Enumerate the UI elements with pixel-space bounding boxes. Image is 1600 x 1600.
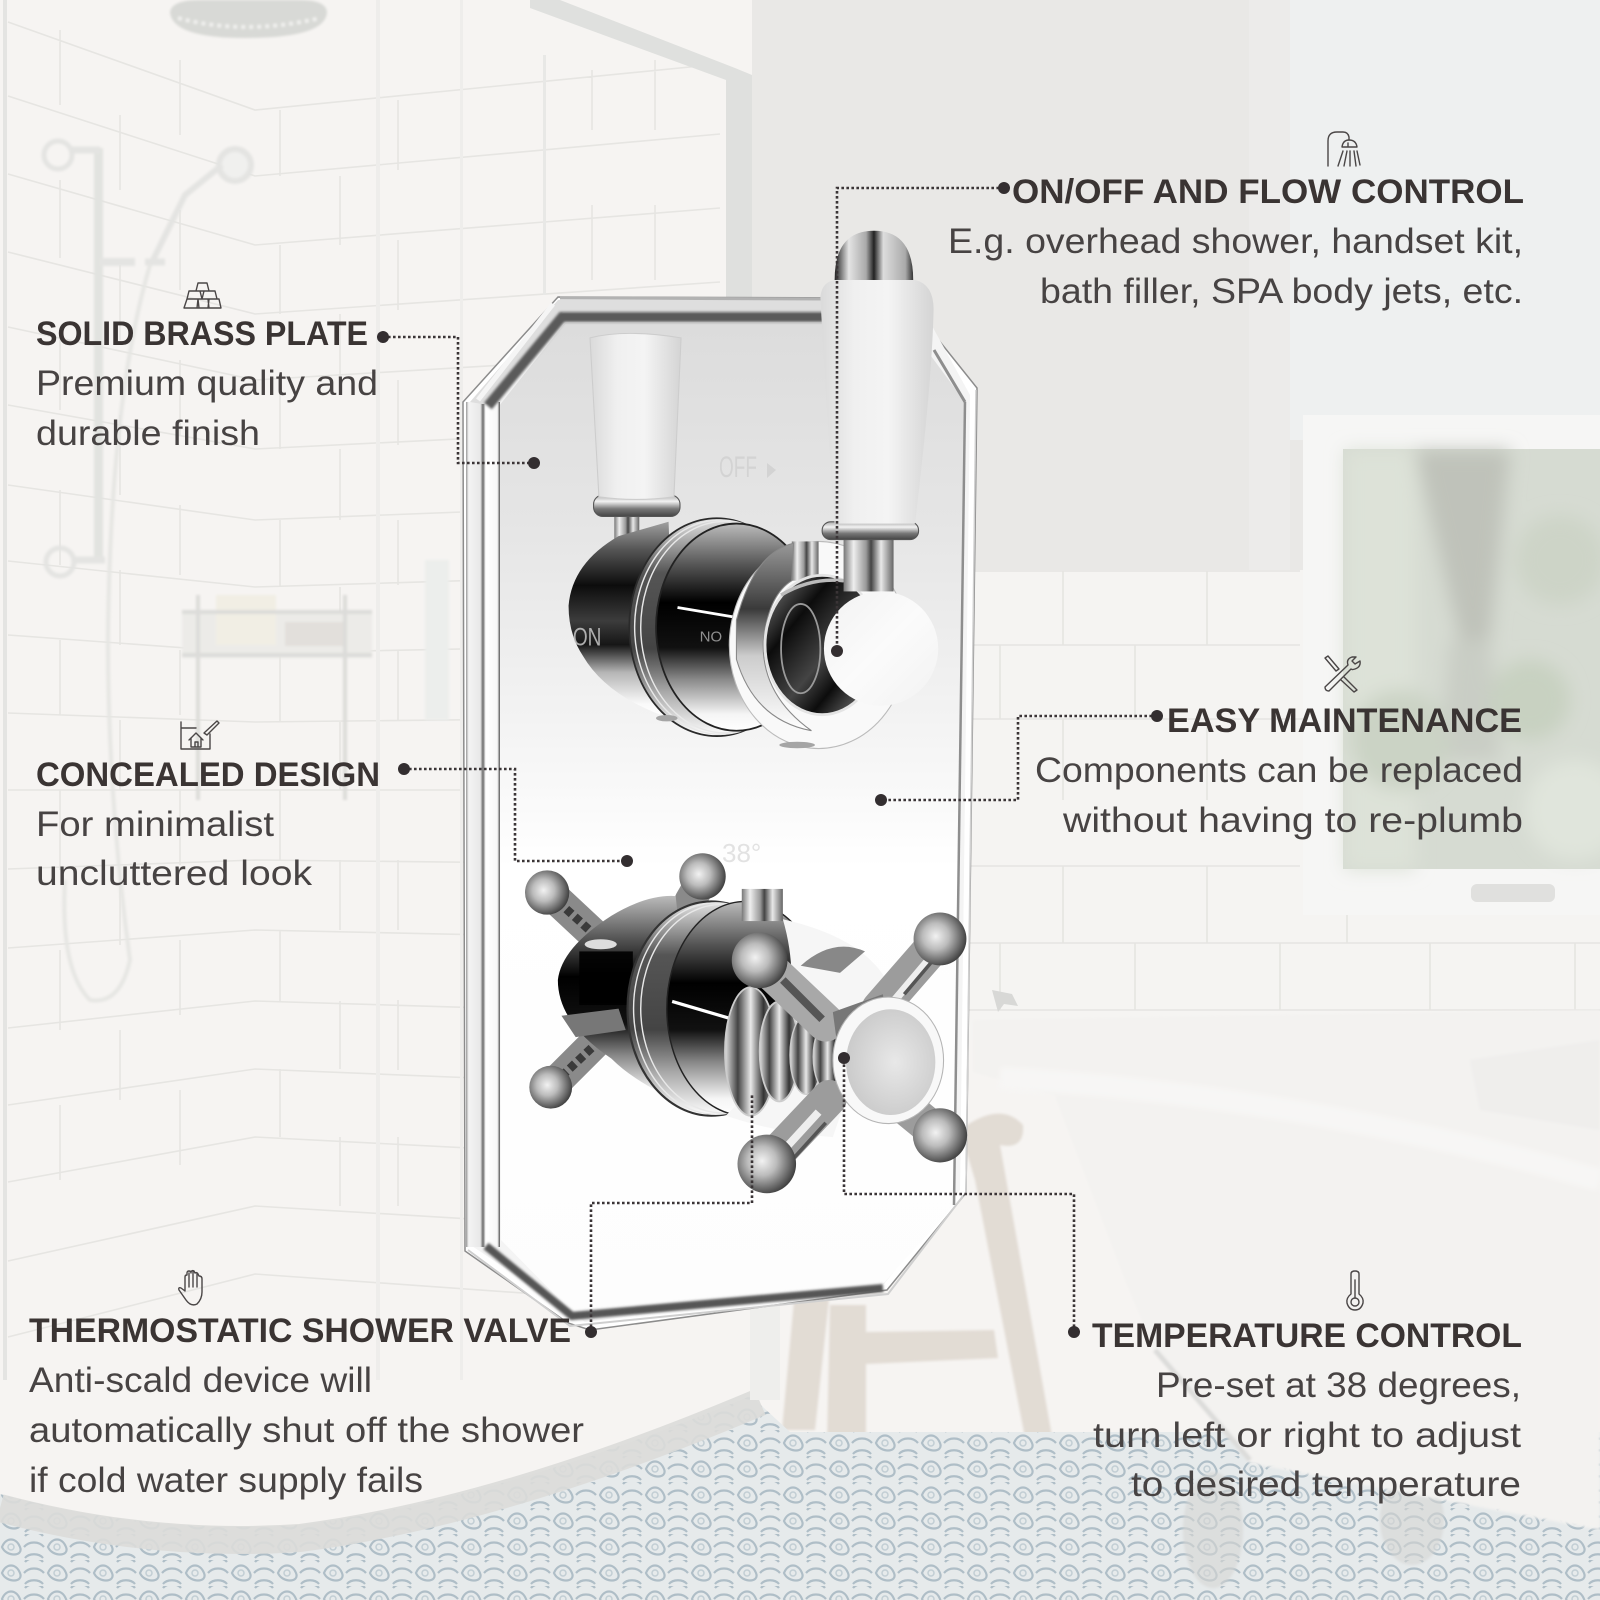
leader line <box>838 1052 1080 1338</box>
heading: SOLID BRASS PLATE <box>36 315 368 353</box>
description: bath filler, SPA body jets, etc. <box>1040 272 1523 311</box>
description: turn left or right to adjust <box>1093 1416 1521 1455</box>
upper on/off flow control valve <box>569 231 938 749</box>
description: automatically shut off the shower <box>29 1411 584 1450</box>
leader line <box>875 710 1163 806</box>
lower temperature control valve <box>525 853 967 1193</box>
description: For minimalist <box>36 805 274 844</box>
grooved ring <box>627 901 804 1116</box>
back cross handle <box>525 853 726 1109</box>
heading: CONCEALED DESIGN <box>36 756 380 794</box>
back body <box>558 896 697 1109</box>
icon: thermometer <box>1347 1271 1363 1310</box>
main cylinder <box>667 901 824 1116</box>
handle face cap <box>833 997 944 1124</box>
description <box>36 364 378 453</box>
description <box>1035 751 1523 840</box>
heading: THERMOSTATIC SHOWER VALVE <box>29 1312 571 1350</box>
callout: thermostatic shower valve <box>29 1094 752 1500</box>
callout: on/off and flow control <box>831 132 1524 657</box>
plate rim left bar <box>466 402 500 1247</box>
description: E.g. overhead shower, handset kit, <box>948 222 1523 261</box>
cylinder ring <box>573 518 817 736</box>
icon: house blueprint <box>181 721 219 749</box>
engraved 38 degree label: 38° <box>722 838 761 868</box>
shower tray <box>0 1300 780 1540</box>
small wall fixture <box>992 990 1018 1012</box>
description: without having to re-plumb <box>1062 801 1523 840</box>
description <box>29 1361 584 1500</box>
heading: TEMPERATURE CONTROL <box>1092 1317 1522 1355</box>
engraved OFF label: OFF <box>719 451 757 484</box>
description: Anti-scald device will <box>29 1361 372 1400</box>
plate rim top <box>470 300 830 404</box>
heading: ON/OFF AND FLOW CONTROL <box>1012 173 1524 211</box>
lever knob <box>824 591 938 706</box>
knurled barrel <box>725 987 842 1116</box>
description: uncluttered look <box>36 854 313 893</box>
small screws <box>656 715 815 748</box>
window <box>1303 415 1600 915</box>
description: Premium quality and <box>36 364 378 403</box>
leader line <box>831 182 1010 657</box>
leader line <box>585 1094 752 1338</box>
callout: concealed design <box>36 721 633 893</box>
cylinder ring: ON <box>573 624 601 652</box>
description: Components can be replaced <box>1035 751 1523 790</box>
icon: crossed wrench and screwdriver <box>1325 656 1360 692</box>
valve wall plate <box>463 297 977 1330</box>
floor <box>0 1395 1600 1600</box>
cylinder ring: ON <box>700 627 722 644</box>
description: Pre-set at 38 degrees, <box>1156 1366 1521 1405</box>
overhead shower head <box>170 0 327 38</box>
cylinder front collar <box>729 541 908 749</box>
description: if cold water supply fails <box>29 1461 423 1500</box>
heading: EASY MAINTENANCE <box>1167 702 1522 740</box>
tile grid left wall <box>8 22 720 1337</box>
description: durable finish <box>36 414 260 453</box>
corner shelf <box>182 560 449 800</box>
description <box>948 222 1523 311</box>
right wall <box>752 0 1600 1040</box>
plate rim bottom <box>486 1246 883 1316</box>
leader line <box>377 331 540 469</box>
front lever stem <box>844 538 894 591</box>
cylinder back body <box>569 522 676 720</box>
wooden stool <box>782 1114 1055 1489</box>
description <box>1093 1366 1521 1504</box>
callout: easy maintenance <box>875 656 1523 840</box>
glass shower frame <box>3 0 752 1490</box>
bathtub <box>973 1010 1600 1588</box>
callout: solid brass plate <box>36 283 540 469</box>
handset shower and rail <box>44 141 251 1000</box>
leader line <box>398 763 633 867</box>
icon: shower <box>1328 132 1360 166</box>
description: to desired temperature <box>1131 1465 1521 1504</box>
callout: temperature control <box>838 1052 1522 1504</box>
chrome dome cap <box>835 231 913 280</box>
description <box>36 805 313 893</box>
front lever collar <box>822 522 919 540</box>
front cross handle <box>732 912 967 1193</box>
locking pin <box>742 889 783 921</box>
front lever porcelain handle <box>820 280 934 524</box>
icon: gold bars <box>184 283 221 308</box>
icon: hand <box>179 1271 202 1305</box>
back lever <box>590 333 681 540</box>
tile grid right wall <box>966 571 1600 1010</box>
